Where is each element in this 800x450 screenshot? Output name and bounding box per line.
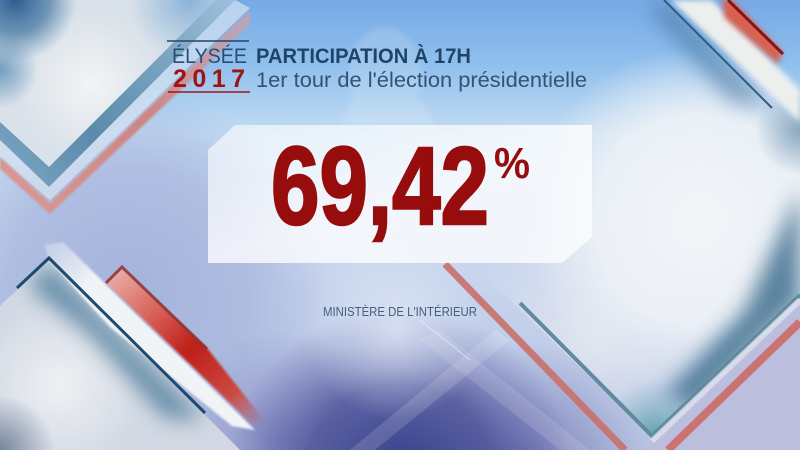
faded portrait silhouette xyxy=(340,27,435,125)
title: PARTICIPATION À 17H xyxy=(256,43,471,68)
cloud panel: top left xyxy=(0,0,216,167)
chevron: bottom left xyxy=(17,242,272,436)
chevron: top left xyxy=(0,0,250,214)
cloud panel: bottom right xyxy=(510,54,800,433)
chevron: top right xyxy=(650,0,800,122)
percent sign: % xyxy=(494,139,530,188)
logo: Élysée 2017: ÉLYSÉE xyxy=(172,45,247,68)
lavender corner: bottom right xyxy=(645,300,800,450)
value panel xyxy=(208,125,592,263)
logo: Élysée 2017 xyxy=(167,41,250,93)
big percentage value: 69,42 xyxy=(271,125,489,248)
subtitle: 1er tour de l'élection présidentielle xyxy=(256,68,587,92)
cloud panel: bottom left xyxy=(0,259,240,450)
logo: Élysée 2017: 2017 xyxy=(173,65,245,93)
source: MINISTÈRE DE L'INTÉRIEUR xyxy=(323,304,477,319)
chevron: bottom right xyxy=(445,264,800,450)
